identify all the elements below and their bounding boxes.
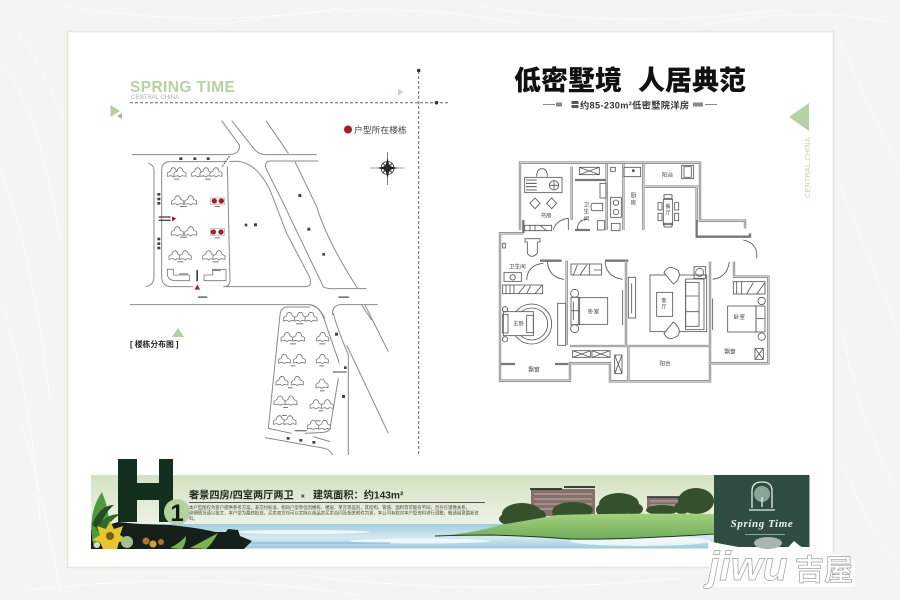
main title: 低密墅境 [514, 59, 622, 98]
water streaks [230, 530, 710, 546]
floor plan: upper rooms: 书房 [540, 211, 552, 219]
roads [130, 121, 378, 320]
site map: north parcel [130, 121, 378, 320]
letter H [118, 459, 173, 522]
floor plan: upper rooms: 餐 [666, 203, 671, 210]
green hill [435, 514, 716, 539]
guide dots [417, 69, 438, 104]
icon: compass [370, 152, 404, 185]
main title, second phrase: 人居典范 [638, 59, 746, 98]
right side triangle [789, 103, 809, 131]
banner disclaimer [189, 504, 479, 522]
floor plan: lower rooms: 卫生间 [509, 263, 526, 271]
floor plan: lower rooms: 厅 [662, 305, 667, 311]
banner disclaimer: 本户型图仅为客户提供参考方案，非交付标准，相同户型单位因楼栋、楼层、单元等差别，其结构、管道、面积等可能有不同，且存在镜像关系， [189, 504, 470, 511]
floor plan: upper rooms: 厅 [666, 211, 671, 217]
bed 2 [578, 298, 608, 324]
bottom banner [91, 459, 716, 549]
heading: Spring Time: SPRING TIME [130, 79, 235, 96]
kitchen fixture [624, 167, 641, 177]
floor plan: lower rooms: 卧室 [588, 307, 600, 315]
red unit markers [172, 198, 224, 290]
floor plan: lower rooms: 飘窗 [528, 365, 540, 373]
banner heading: 奢景四房/四室两厅两卫 × 建筑面积：约143m² [189, 488, 404, 502]
foliage [91, 492, 218, 549]
watermark blotch [708, 541, 855, 587]
bathroom [600, 183, 606, 198]
wardrobes [503, 285, 543, 294]
floor plan: upper rooms: 阳台 [662, 171, 674, 179]
floor plan [500, 163, 768, 381]
watermark: jiwu [703, 543, 853, 589]
floor plan: upper rooms: 房 [631, 199, 637, 207]
map caption: building layout [130, 328, 184, 349]
dark shore [91, 522, 252, 549]
banner sky [91, 475, 716, 525]
icon: arched tree [749, 482, 775, 510]
study furniture [537, 169, 547, 177]
banner rule [189, 502, 485, 503]
master bed [512, 304, 552, 344]
logo panel: Spring Time [731, 518, 793, 530]
balcony fixture [682, 165, 694, 179]
trees [499, 488, 714, 525]
living room [650, 275, 707, 332]
floor plan: lower rooms: 阳台 [659, 359, 671, 367]
shaft with cross [579, 167, 599, 175]
TV cabinets [558, 303, 566, 345]
dining table [663, 199, 673, 225]
decorative triangles [110, 89, 404, 119]
bathroom fixtures [525, 239, 540, 256]
site map: south parcel [265, 297, 388, 455]
map caption: building layout: [ 楼栋分布图 ] [130, 339, 179, 349]
heading: Spring Time: CENTRAL CHINA [131, 95, 179, 101]
distant buildings [530, 487, 687, 516]
bed 3 [728, 306, 756, 332]
floor plan: upper rooms: 间 [584, 214, 590, 222]
floor plan: upper rooms [520, 163, 745, 233]
entrance and label marks [157, 157, 325, 281]
banner disclaimer: 详细情况请以批文，本户型为最终批准，买卖双方均可以实际以商品房买卖合同及相关附件为准，本公司有权对本户型资料进行调整，敬请留意最新资 [189, 510, 479, 516]
number 1 badge: 1 [170, 500, 184, 527]
buildings [273, 312, 333, 430]
number 1 badge [164, 499, 190, 527]
white content panel [68, 32, 834, 568]
marks [287, 333, 347, 444]
floor plan: upper rooms: 卫 [584, 201, 590, 208]
right vertical label: CENTRAL CHINA [803, 137, 812, 198]
watermark: jiwu: 吉屋 [795, 547, 853, 589]
dashed guide lines [130, 71, 450, 455]
subtitle: 约85-230m²低密墅院洋房 [580, 99, 689, 110]
banner disclaimer: 料。 [189, 515, 198, 522]
logo panel [714, 475, 810, 549]
floor plan: lower rooms: 卧室 [734, 313, 745, 321]
floor plan: lower rooms: 客 [662, 297, 667, 304]
subtitle [543, 99, 717, 110]
shaft detail [611, 167, 615, 171]
watermark: jiwu: jiwu [703, 543, 788, 589]
floor plan: lower rooms: 飘窗 [724, 347, 736, 355]
banner water [91, 524, 716, 548]
buildings [167, 168, 226, 281]
legend: unit building: 户型所在楼栋 [354, 124, 407, 135]
floor plan: upper rooms: 生 [584, 207, 590, 215]
shaft boxes [573, 351, 591, 357]
floor plan: lower rooms: 主卧 [513, 319, 525, 327]
roads [265, 305, 388, 455]
floor plan: upper rooms: 厨 [631, 192, 637, 199]
doors [547, 240, 757, 279]
floor plan: lower rooms [500, 220, 768, 381]
